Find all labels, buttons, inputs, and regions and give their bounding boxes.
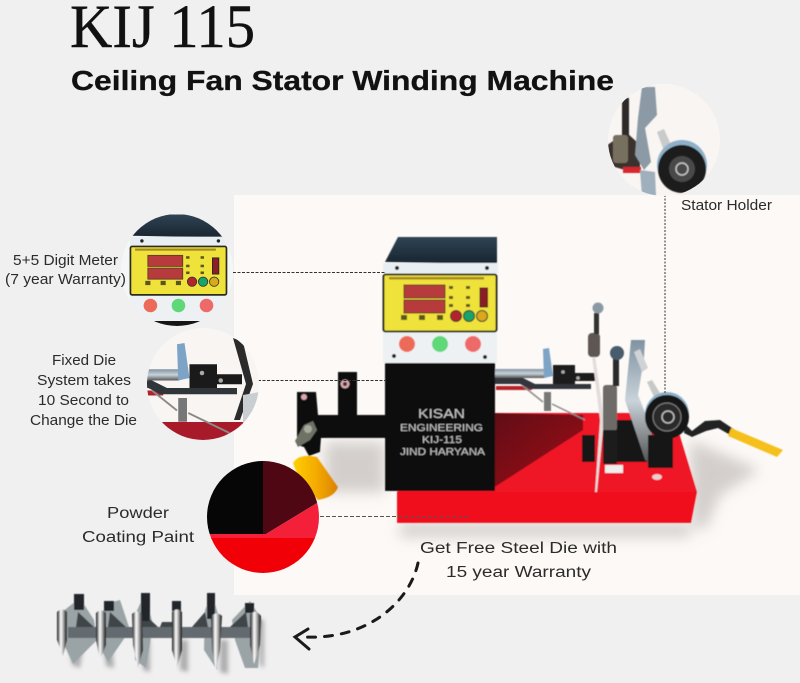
black column [648, 435, 673, 468]
clamp [295, 421, 317, 447]
die fingers [57, 610, 261, 671]
label: powder coating: Powder [107, 505, 169, 522]
label: free steel die: Get Free Steel Die with [420, 540, 617, 557]
panel: machine photo backdrop [234, 195, 800, 595]
label: meter: (7 year Warranty) [5, 272, 126, 288]
label: die system: Change the Die [30, 413, 137, 429]
holder shaft [656, 129, 670, 148]
rear pin stem [594, 313, 599, 334]
black body [385, 362, 495, 491]
leader line: die system [258, 380, 385, 382]
label: stator holder: Stator Holder [681, 198, 772, 214]
upper plate [383, 263, 498, 274]
base front [397, 492, 697, 523]
lower buttons [399, 336, 415, 352]
front pin lower [603, 430, 617, 464]
red displays [404, 285, 445, 298]
label: meter [5, 253, 126, 288]
disc face [658, 145, 706, 193]
panel buttons [450, 310, 462, 322]
black arm bars [297, 372, 386, 456]
support post [544, 392, 551, 411]
die teeth [76, 612, 248, 627]
detail circle: meter [130, 214, 228, 326]
steel die [57, 593, 264, 674]
housing column [385, 362, 495, 491]
rear pin stem [622, 98, 629, 136]
arrow: to steel die [295, 563, 418, 649]
dark parts behind [606, 132, 640, 170]
label: powder coating [82, 505, 195, 546]
rear pin collar [613, 135, 628, 163]
stator disc [645, 392, 689, 436]
power switch [480, 288, 488, 307]
front pin knob [610, 346, 624, 360]
front pin [603, 346, 624, 473]
detail circle: stator holder [606, 84, 720, 196]
label: meter: 5+5 Digit Meter [13, 253, 118, 269]
detail circle: die system [147, 338, 259, 440]
control unit [383, 237, 498, 363]
black block [553, 365, 595, 384]
brand line: KISAN [418, 406, 465, 421]
chrome bar [495, 369, 545, 378]
label: die system: 10 Second to [38, 393, 129, 409]
bolt [652, 474, 662, 480]
label: die system: Fixed Die [52, 353, 116, 369]
lower plate [383, 331, 497, 363]
label: free steel die [420, 540, 617, 581]
arm bolts [301, 394, 307, 400]
shaft [647, 380, 660, 397]
engineering line: ENGINEERING [400, 422, 483, 434]
die mechanism [495, 348, 595, 420]
bracket pin [634, 349, 648, 372]
leader line: meter [233, 272, 385, 274]
coating swatch: light red [210, 502, 319, 539]
black base blocks [582, 435, 595, 462]
machine illustration [293, 237, 783, 537]
body lettering [400, 406, 485, 458]
rear pin collar [588, 333, 600, 357]
strut [523, 386, 585, 420]
die drop shadows [66, 620, 264, 674]
rear pin [588, 302, 604, 492]
bracket foot [640, 170, 656, 196]
label: die system: System takes [37, 373, 131, 389]
yellow grip [728, 428, 783, 457]
chrome bracket [635, 87, 657, 170]
panel caption [389, 277, 484, 280]
front pin chrome [603, 385, 617, 431]
red rail shadow [496, 386, 532, 390]
left arm with cone [293, 372, 386, 500]
handle [684, 420, 735, 437]
lower chrome rail [495, 378, 591, 389]
leader line: stator holder [664, 195, 666, 393]
top housing [385, 237, 497, 264]
location line: JIND HARYANA [400, 447, 485, 458]
leader line: paint [320, 516, 470, 518]
die backing plates [62, 593, 262, 670]
subtitle: Ceiling Fan Stator Winding Machine [71, 65, 614, 96]
winding pins and stator holder [582, 302, 783, 492]
lever [543, 348, 553, 378]
coating swatch: maroon [263, 460, 322, 534]
coating swatch: red [211, 538, 315, 573]
front pin foot [605, 465, 623, 473]
detail circle: powder coating [205, 460, 323, 574]
base shaded area [490, 413, 583, 490]
die tops [74, 593, 254, 621]
yellow cone weight [293, 456, 338, 500]
rear pin knob [592, 302, 604, 314]
model line: KIJ-115 [422, 435, 463, 446]
label: free steel die: 15 year Warranty [446, 564, 591, 581]
small indicators [401, 286, 470, 320]
base top [397, 413, 697, 492]
disc rim [656, 139, 708, 172]
bracket [625, 340, 652, 462]
yellow control panel [384, 274, 496, 332]
die band [68, 627, 258, 638]
front pin stem [613, 358, 619, 386]
base [397, 413, 697, 523]
red base fragment [623, 167, 641, 173]
rear pin shaft [592, 355, 604, 492]
coating swatch: black [205, 460, 265, 534]
label: die system [30, 353, 137, 429]
shadows behind machine [325, 440, 760, 537]
label: powder coating: Coating Paint [82, 529, 195, 546]
